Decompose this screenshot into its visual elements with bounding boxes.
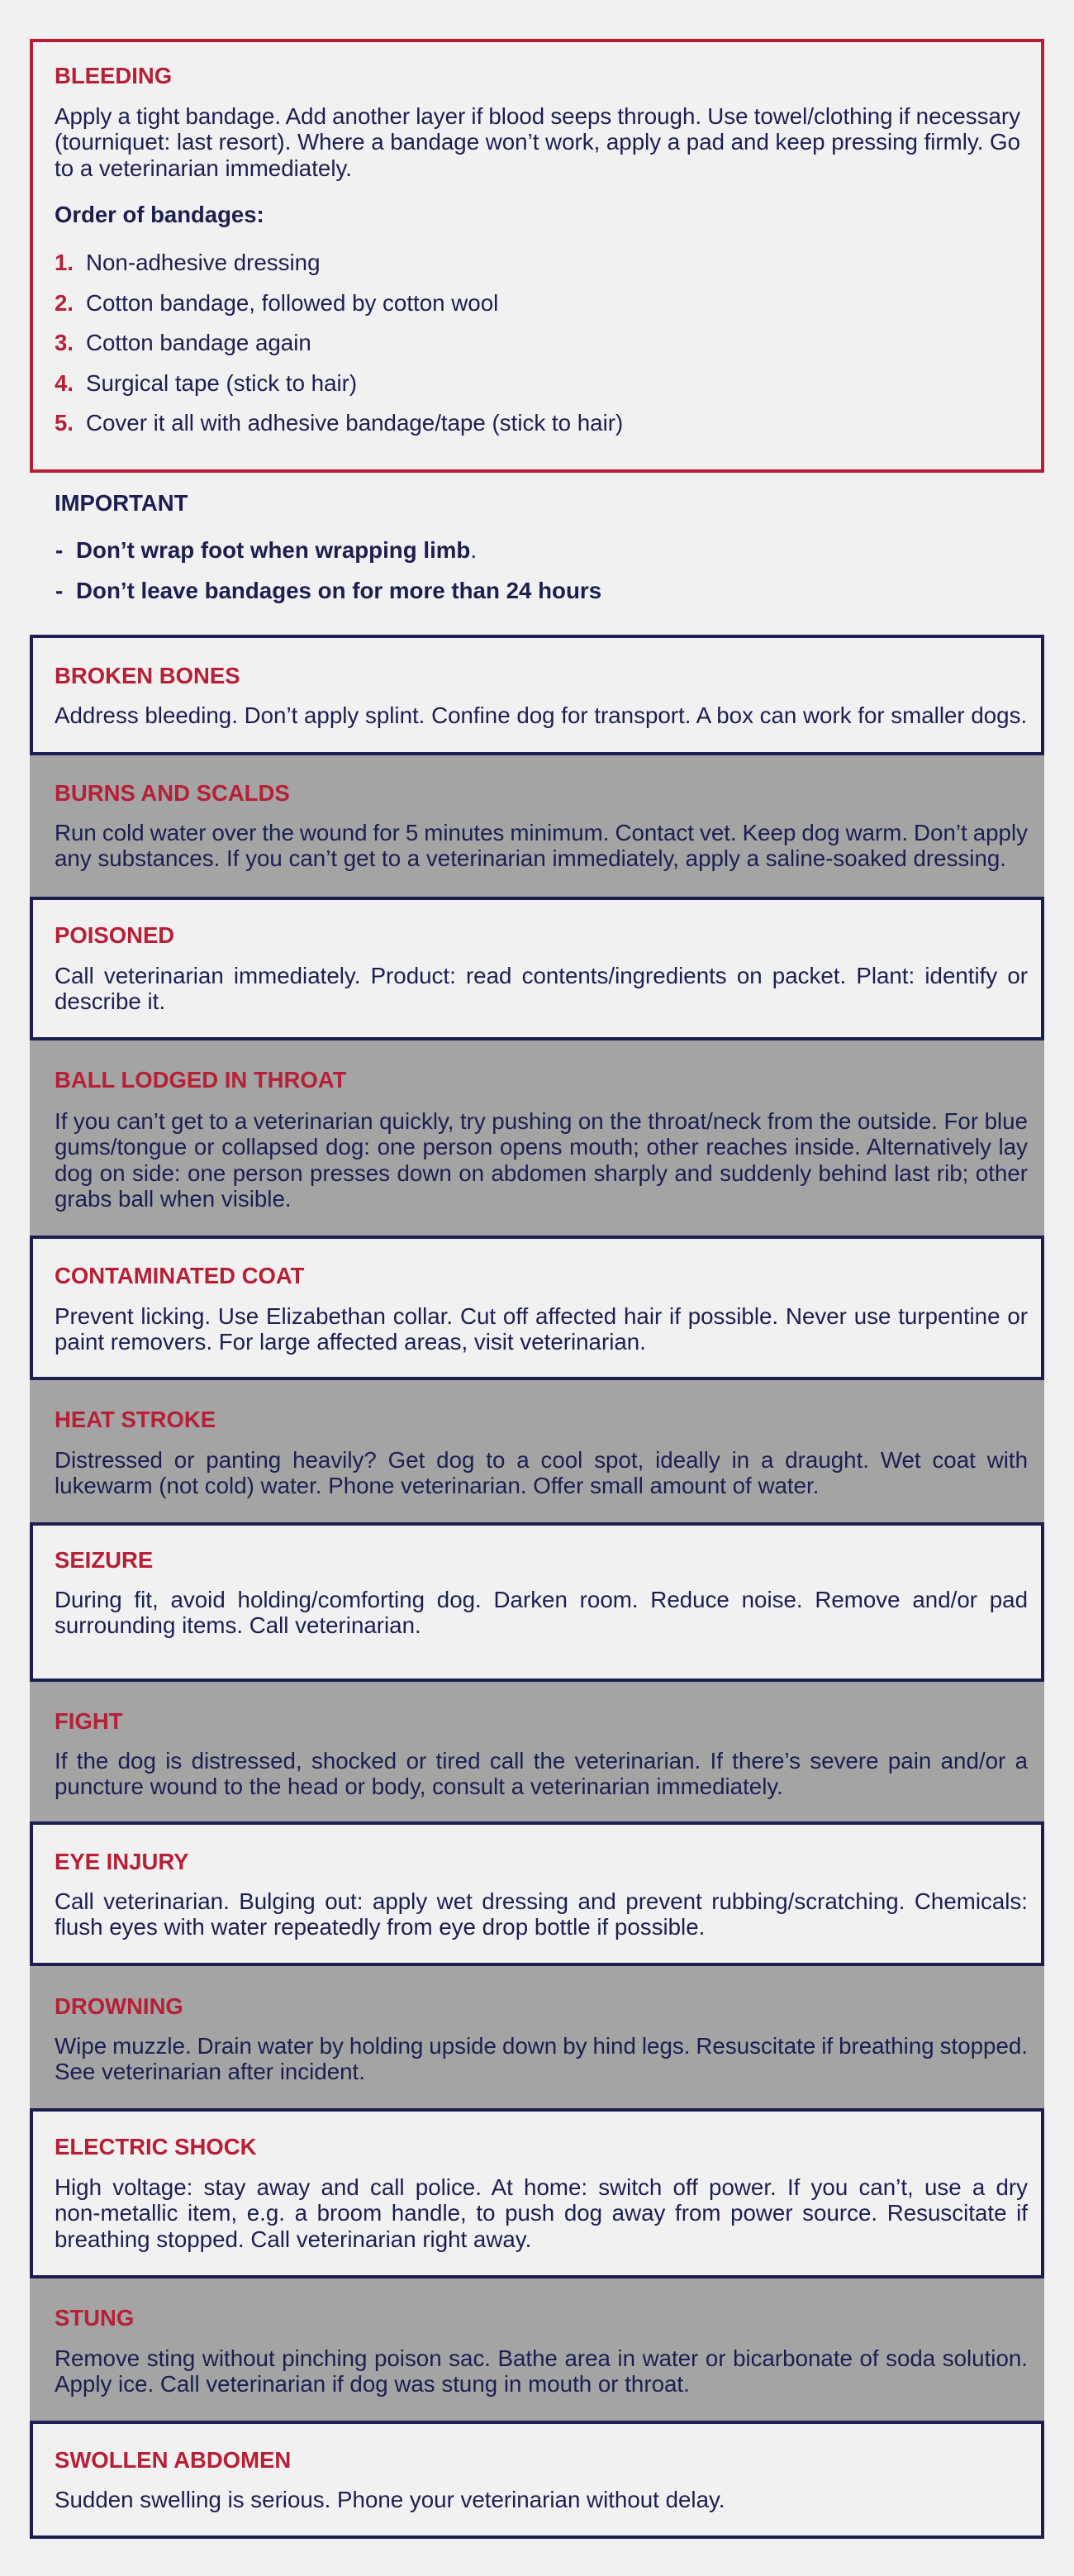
text: electric shock: High voltage: stay away and call police. At home: switch off power. If you can’t, use a dry bbox=[55, 2174, 1028, 2200]
heading: burns and scalds: BURNS AND SCALDS bbox=[55, 780, 290, 806]
panel: bleeding: 3. bbox=[55, 330, 74, 355]
list item 1 bbox=[55, 250, 321, 275]
panel: broken bones bbox=[30, 635, 1044, 755]
text: burns and scalds: Run cold water over the wound for 5 minutes minimum. Contact vet. Keep dog warm. Don’t apply bbox=[55, 820, 1028, 845]
subheading: order of bandages: Order of bandages: bbox=[55, 202, 264, 227]
heading: fight: FIGHT bbox=[55, 1708, 122, 1734]
text: contaminated coat bbox=[55, 1303, 1028, 1355]
text: ball lodged in throat: dog on side: one person presses down on abdomen sharply and suddenly behind last rib; other bbox=[55, 1160, 1028, 1186]
panel: eye injury bbox=[30, 1821, 1044, 1966]
panel: stung bbox=[30, 2278, 1044, 2421]
bullet: don't wrap foot: - bbox=[55, 537, 63, 563]
text: electric shock bbox=[55, 2174, 1028, 2252]
panel: drowning bbox=[30, 1966, 1044, 2108]
heading: electric shock: ELECTRIC SHOCK bbox=[55, 2134, 256, 2159]
text: Don’t wrap foot when wrapping limb. bbox=[76, 537, 477, 563]
panel: fight bbox=[30, 1682, 1044, 1822]
text: ball lodged in throat: If you can’t get to a veterinarian quickly, try pushing on the throat/neck from the outside. For blue bbox=[55, 1108, 1028, 1134]
list item 3 bbox=[55, 330, 311, 355]
panel: bleeding: 2. bbox=[55, 290, 74, 316]
panel: bleeding: 5. bbox=[55, 410, 74, 436]
panel: burns and scalds bbox=[30, 755, 1044, 898]
text: bleeding instructions bbox=[55, 103, 1020, 181]
heading: drowning: DROWNING bbox=[55, 1993, 183, 2019]
text: heat stroke: lukewarm (not cold) water. Phone veterinarian. Offer small amount of water. bbox=[55, 1473, 819, 1498]
text: drowning: See veterinarian after incident. bbox=[55, 2059, 365, 2084]
text: seizure: During fit, avoid holding/comforting dog. Darken room. Reduce noise. Remove and/or pad bbox=[55, 1587, 1028, 1612]
panel: poisoned bbox=[30, 897, 1044, 1040]
heading: contaminated coat: CONTAMINATED COAT bbox=[55, 1263, 304, 1288]
text: poisoned: Call veterinarian immediately. Product: read contents/ingredients on packet. Plant: identify or bbox=[55, 963, 1028, 988]
text: eye injury: Call veterinarian. Bulging out: apply wet dressing and prevent rubbing/scratching. Chemicals: bbox=[55, 1888, 1028, 1914]
list item 5 bbox=[55, 410, 623, 436]
bullet: don't leave bandages: - bbox=[55, 578, 63, 603]
heading: heat stroke: HEAT STROKE bbox=[55, 1407, 216, 1432]
text: ball lodged in throat: grabs ball when visible. bbox=[55, 1186, 292, 1212]
panel: bleeding: 4. bbox=[55, 370, 74, 396]
heading: poisoned: POISONED bbox=[55, 922, 174, 948]
text: ball lodged in throat: gums/tongue or collapsed dog: one person opens mouth; other reaches inside. Alternatively lay bbox=[55, 1134, 1028, 1159]
text: bleeding instructions: to a veterinarian immediately. bbox=[55, 155, 352, 181]
text: electric shock: breathing stopped. Call veterinarian right away. bbox=[55, 2226, 531, 2252]
text: Don’t leave bandages on for more than 24 hours bbox=[76, 578, 601, 603]
panel: contaminated coat bbox=[30, 1236, 1044, 1380]
text: electric shock: non-metallic item, e.g. a broom handle, to push dog away from power source. Resuscitate if bbox=[55, 2200, 1028, 2226]
panel: bleeding: Non-adhesive dressing bbox=[86, 250, 321, 275]
text: contaminated coat: paint removers. For large affected areas, visit veterinarian. bbox=[55, 1329, 646, 1355]
panel: ball lodged in throat bbox=[30, 1040, 1044, 1236]
list item 4 bbox=[55, 370, 357, 396]
text: drowning: Wipe muzzle. Drain water by holding upside down by hind legs. Resuscitate if breathing stopped. bbox=[55, 2033, 1028, 2059]
text: broken bones: Address bleeding. Don’t apply splint. Confine dog for transport. A box can work for smaller dogs. bbox=[55, 702, 1027, 728]
bullet: don't leave bandages bbox=[55, 578, 601, 603]
panel: heat stroke bbox=[30, 1380, 1044, 1523]
heading: ball lodged in throat: BALL LODGED IN THROAT bbox=[55, 1067, 346, 1093]
text: drowning bbox=[55, 2033, 1028, 2084]
panel: electric shock bbox=[30, 2108, 1044, 2278]
text: heat stroke bbox=[55, 1447, 1028, 1498]
text: fight: puncture wound to the head or body, consult a veterinarian immediately. bbox=[55, 1774, 783, 1799]
text: seizure bbox=[55, 1587, 1028, 1638]
text: bleeding instructions: Apply a tight bandage. Add another layer if blood seeps through. Use towel/clothing if necessary bbox=[55, 103, 1020, 129]
text: fight bbox=[55, 1748, 1028, 1799]
text: burns and scalds: any substances. If you can’t get to a veterinarian immediately, apply a saline-soaked dressing. bbox=[55, 845, 1006, 871]
panel: bleeding: Cover it all with adhesive bandage/tape (stick to hair) bbox=[86, 410, 623, 436]
heading: important: IMPORTANT bbox=[55, 490, 188, 516]
heading: bleeding: BLEEDING bbox=[55, 63, 172, 88]
text: fight: If the dog is distressed, shocked or tired call the veterinarian. If there’s severe pain and/or a bbox=[55, 1748, 1028, 1774]
text: stung: Remove sting without pinching poison sac. Bathe area in water or bicarbonate of soda solution. bbox=[55, 2345, 1028, 2371]
heading: broken bones: BROKEN BONES bbox=[55, 663, 240, 688]
heading: swollen abdomen: SWOLLEN ABDOMEN bbox=[55, 2447, 291, 2473]
text: stung bbox=[55, 2345, 1028, 2397]
text: contaminated coat: Prevent licking. Use Elizabethan collar. Cut off affected hair if possible. Never use turpentine or bbox=[55, 1303, 1028, 1329]
text: swollen abdomen: Sudden swelling is serious. Phone your veterinarian without delay. bbox=[55, 2487, 725, 2512]
text: poisoned: describe it. bbox=[55, 988, 165, 1014]
text: burns and scalds bbox=[55, 820, 1028, 871]
heading: seizure: SEIZURE bbox=[55, 1547, 153, 1573]
text: heat stroke: Distressed or panting heavily? Get dog to a cool spot, ideally in a draught. Wet coat with bbox=[55, 1447, 1028, 1473]
panel: swollen abdomen bbox=[30, 2421, 1044, 2539]
panel: bleeding: 1. bbox=[55, 250, 74, 275]
panel: bleeding: Cotton bandage, followed by cotton wool bbox=[86, 290, 498, 316]
text: bleeding instructions: (tourniquet: last resort). Where a bandage won’t work, apply a pad and keep pressing firmly. Go bbox=[55, 129, 1020, 155]
panel: bleeding: Surgical tape (stick to hair) bbox=[86, 370, 357, 396]
text: ball lodged in throat bbox=[55, 1108, 1028, 1212]
panel: seizure bbox=[30, 1522, 1044, 1682]
text: eye injury bbox=[55, 1888, 1028, 1940]
heading: stung: STUNG bbox=[55, 2305, 134, 2331]
panel: bleeding: Cotton bandage again bbox=[86, 330, 311, 355]
panel: bleeding bbox=[30, 39, 1044, 473]
text: stung: Apply ice. Call veterinarian if dog was stung in mouth or throat. bbox=[55, 2371, 690, 2397]
bullet: don't wrap foot bbox=[55, 537, 477, 563]
text: poisoned bbox=[55, 963, 1028, 1014]
text: seizure: surrounding items. Call veterinarian. bbox=[55, 1612, 421, 1638]
heading: eye injury: EYE INJURY bbox=[55, 1849, 189, 1874]
text: eye injury: flush eyes with water repeatedly from eye drop bottle if possible. bbox=[55, 1914, 705, 1940]
list item 2 bbox=[55, 290, 498, 316]
